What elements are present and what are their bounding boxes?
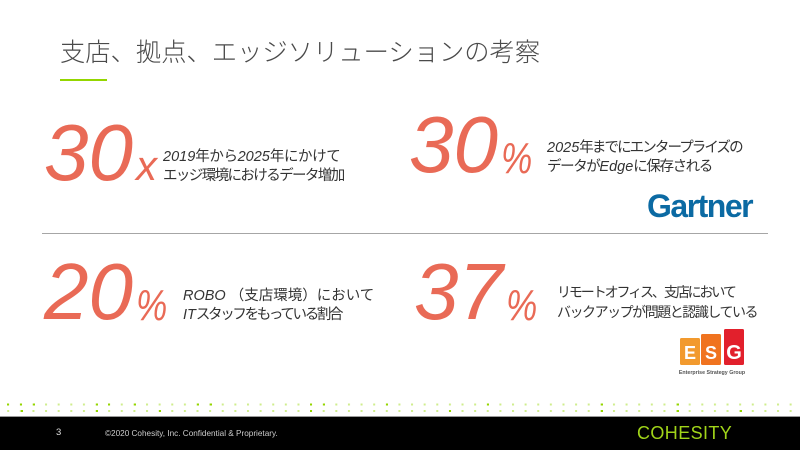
logo: ESG: Enterprise Strategy Group [679, 370, 746, 376]
page number: 3 [56, 427, 61, 438]
stat: 30% Gartner [409, 100, 742, 189]
stat value 37: 37 [414, 247, 503, 336]
logo: Cohesity: COHESITY [637, 423, 732, 443]
stat description [183, 287, 374, 323]
logo: Gartner: Gartner [647, 188, 752, 224]
stat description [557, 284, 757, 320]
stat description: ROBO （支店環境）において [183, 288, 374, 304]
stat description: エッジ環境におけるデータ増加 [163, 168, 344, 184]
dot pattern band [7, 404, 792, 412]
stat description: ITスタッフをもっている割合 [183, 307, 341, 323]
stat unit x: x [136, 142, 157, 189]
stat description [546, 139, 742, 175]
stat: 37% ESG [414, 247, 757, 336]
title accent line [60, 79, 107, 81]
stat unit percent: % [136, 281, 167, 330]
copyright: ©2020 Cohesity, Inc. Confidential & Proprietary. [105, 429, 278, 438]
stat unit percent: % [506, 281, 537, 330]
stat unit percent: % [501, 134, 532, 183]
stat description: 2019年から2025年にかけて [163, 149, 340, 165]
stat description [162, 148, 344, 184]
stat description: 2025年までにエンタープライズの [547, 140, 742, 156]
stat value 30: 30 [409, 100, 498, 189]
footer bar [0, 416, 800, 450]
title: 支店、拠点、エッジソリューションの考察 [60, 39, 540, 67]
logo: ESG: G [726, 342, 742, 364]
stat description: バックアップが問題と認識している [557, 304, 757, 320]
stat value 30: 30 [44, 108, 133, 197]
stat: 20% [44, 247, 374, 336]
stat description: リモートオフィス、支店において [557, 284, 735, 300]
stat: 30x [44, 108, 344, 197]
logo: ESG: E [684, 343, 696, 363]
stat description: データがEdgeに保存される [547, 159, 712, 175]
logo: ESG: S [705, 343, 717, 363]
logo: ESG [679, 329, 746, 376]
divider [42, 233, 768, 234]
stat value 20: 20 [44, 247, 133, 336]
